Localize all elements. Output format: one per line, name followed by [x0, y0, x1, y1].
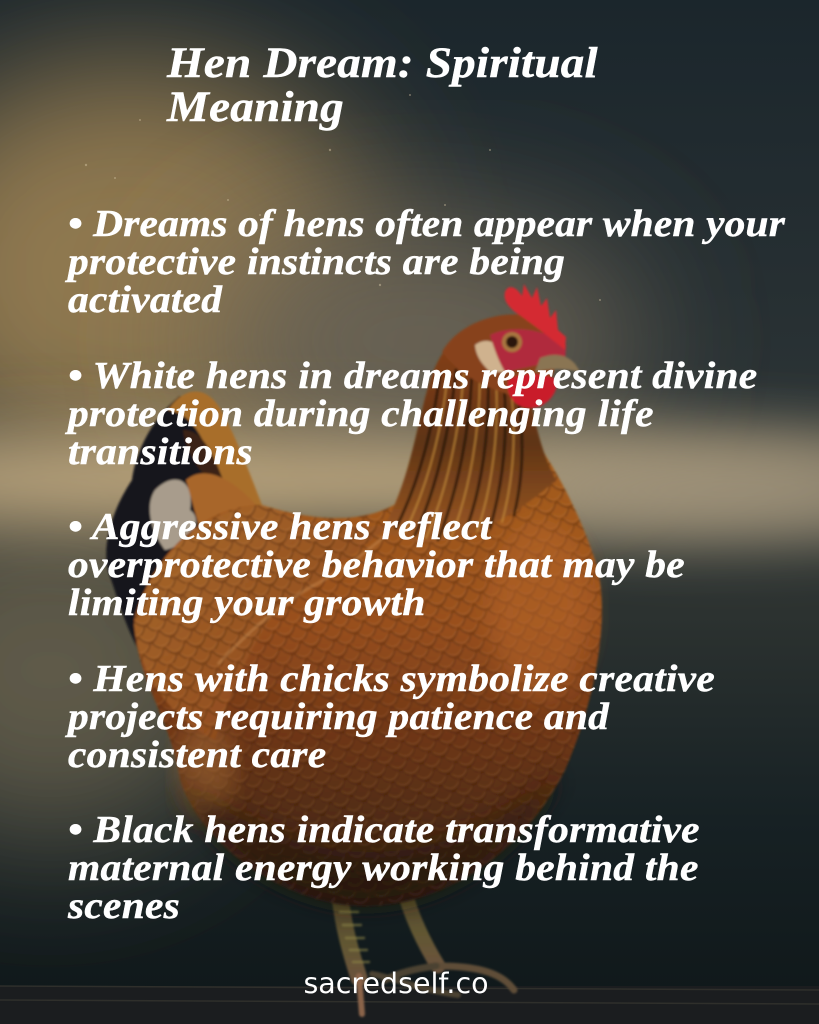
hen tail feathers	[106, 396, 262, 660]
text block: black hens: scenes	[68, 885, 180, 927]
text block: protective instincts: • Dreams of hens often appear when your	[68, 203, 785, 245]
hen cheek	[475, 341, 508, 372]
hen eye	[502, 332, 522, 352]
text block: aggressive hens: overprotective behavior that may be	[68, 544, 685, 586]
ground	[0, 986, 819, 1024]
icon: hen legs	[340, 885, 514, 1014]
hen wing	[134, 505, 390, 740]
title: Hen Dream: Spiritual	[167, 40, 598, 87]
text block: black hens: • Black hens indicate transformative	[68, 809, 700, 851]
text block: aggressive hens	[68, 506, 685, 624]
icon: hen	[106, 284, 602, 906]
hen beak	[535, 355, 580, 372]
title	[166, 40, 598, 131]
specks of light	[85, 59, 601, 301]
hen head	[442, 314, 560, 397]
footer: site name: sacredself.co	[303, 967, 489, 1000]
hen neck	[382, 342, 556, 542]
hen belly shadow	[180, 770, 565, 906]
hen wattle	[507, 374, 557, 408]
hen wing highlight	[218, 530, 392, 664]
text block: white hens: protection during challenging life	[68, 393, 654, 435]
text block: hens with chicks: projects requiring patience and	[68, 696, 609, 738]
text block: white hens: • White hens in dreams represent divine	[68, 355, 757, 397]
text block: white hens	[64, 355, 757, 473]
text block: white hens: transitions	[68, 431, 253, 473]
hen breast highlight	[490, 520, 590, 700]
text block: hens with chicks: • Hens with chicks symbolize creative	[68, 658, 715, 700]
hen lower-left highlight	[177, 720, 233, 820]
text block: protective instincts	[64, 203, 786, 321]
hen neck streaks	[396, 370, 522, 540]
text block: aggressive hens: • Aggressive hens reflect	[68, 506, 492, 548]
hen comb	[505, 284, 566, 350]
title: Meaning	[167, 84, 344, 131]
text block: black hens: maternal energy working behind the	[68, 847, 699, 889]
text block: aggressive hens: limiting your growth	[68, 582, 426, 624]
text block: protective instincts: protective instincts are being	[68, 241, 565, 283]
text block: protective instincts: activated	[68, 279, 222, 321]
hen body	[134, 420, 602, 906]
text block: hens with chicks	[64, 658, 715, 776]
text block: black hens	[68, 809, 700, 927]
text block: hens with chicks: consistent care	[68, 734, 326, 776]
